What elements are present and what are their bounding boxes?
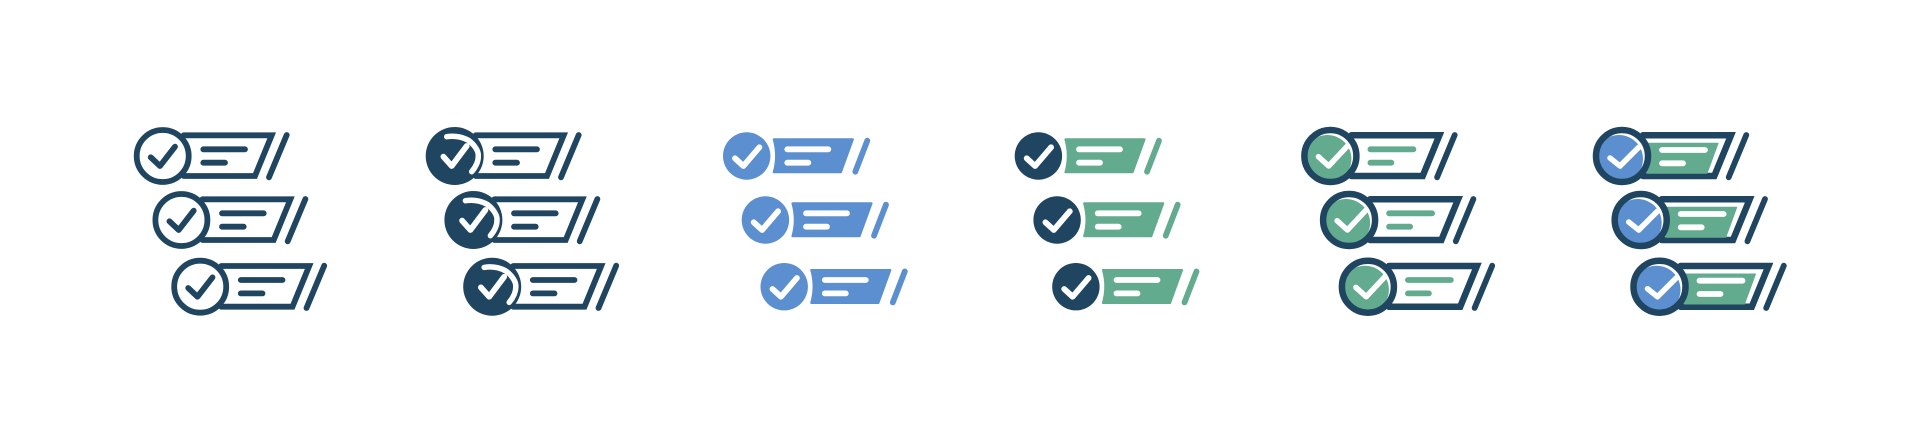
row 3 [174, 261, 324, 313]
row 3 [1052, 263, 1196, 310]
row 3 [463, 258, 616, 316]
row 2 [155, 194, 305, 246]
icon set 2: dark solid circle checklist [426, 127, 616, 316]
row 3 [1341, 261, 1492, 314]
row 3 [1632, 261, 1784, 314]
icon set 3: flat blue checklist [723, 132, 905, 310]
row 1 [1595, 130, 1746, 183]
row 2 [1033, 196, 1178, 244]
row 1 [723, 132, 867, 180]
row 1 [1303, 130, 1455, 183]
row 2 [742, 196, 886, 244]
icon set 1: dark outline checklist [137, 130, 324, 313]
row 2 [1322, 194, 1473, 247]
icon set 6: outlined blue and green checklist [1595, 130, 1784, 314]
icon set 5: outlined green checklist [1303, 130, 1492, 314]
row 2 [444, 191, 597, 249]
row 1 [426, 127, 579, 185]
row 2 [1614, 194, 1765, 247]
row 3 [760, 263, 905, 310]
row 1 [137, 130, 287, 182]
row 1 [1015, 132, 1159, 180]
icon set 4: flat green and navy checklist [1015, 132, 1197, 310]
